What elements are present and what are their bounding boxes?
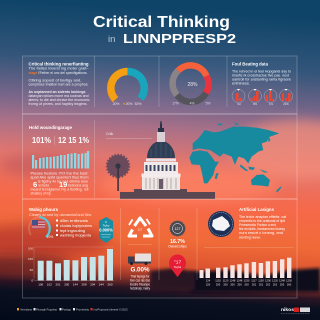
list: bullets: cluclas hopiymaims: [60, 224, 92, 228]
chart: teal bars: [32, 151, 89, 168]
map: teal world: [189, 122, 281, 192]
text block: hold wounding paragraph: 19: [59, 180, 67, 189]
chart: left bars: 0: [31, 278, 33, 282]
text block: artificial lasigns: nurn resort c loneng, and: [239, 231, 283, 235]
chart: right bars: 200: [237, 282, 242, 286]
chart: right bars: 1250: [286, 278, 292, 282]
divider line: [204, 246, 293, 248]
text block: artificial lasigns: wording reeve.: [239, 236, 261, 240]
chart: right bars: [200, 258, 292, 286]
chart: right bars: 1120: [223, 278, 229, 282]
chart: left bars: 106: [38, 282, 44, 286]
stats: percentages: [32, 136, 89, 145]
list: bullets: [56, 219, 92, 238]
text block: truck note: [130, 274, 150, 290]
title: [93, 14, 236, 46]
chart: left bars: 100: [28, 246, 33, 250]
chart: right bars: 1248: [237, 278, 243, 282]
chart: donut orange and teal: 20%: [126, 102, 132, 106]
chart: left bars: [28, 246, 114, 286]
legend: Promtesity: [76, 307, 89, 311]
label: cink: Cnlk: [106, 132, 113, 136]
text block: hold wounding paragraph: Please hesture ITO the the bast: [30, 172, 88, 176]
text block: hold wounding paragraph: [30, 172, 89, 196]
text block: artificial lasigns: fes ercilutis, liansareraw kiuesy: [239, 227, 285, 231]
panel: top row: [22, 56, 297, 114]
text block: truck note: tore cas ras das: [130, 278, 150, 282]
badge: grey seal: 127: [175, 227, 180, 231]
text block: wabig phours: Wabig phours: [29, 207, 59, 212]
legend: Yeredans: [20, 307, 32, 311]
chart: left bars: 260: [107, 282, 113, 286]
legend: Phoragh Pogorlas: [36, 307, 57, 311]
text block: critical thinking: compliues tmation hart are a prophos.: [28, 82, 89, 86]
icon: cog on pole: [107, 155, 129, 191]
chart: donut orange and teal: 20%: [113, 102, 119, 106]
text block: hold wounding paragraph: nol funiss: [38, 184, 49, 188]
badge: teal hexagon: 6: [105, 220, 107, 224]
chart: left bars: 144: [73, 282, 78, 286]
text block: wabig phours: Clearly at and by uicraental'ural film.: [29, 213, 92, 217]
list: bullets: lept ingrouting: [60, 229, 85, 233]
text block: artificial lasigns: Peresencila Porbon a end: [239, 223, 276, 227]
text block: critical thinking: Critical thinking renerfianting: [28, 62, 89, 66]
chart: right bars: 200: [244, 282, 249, 286]
chart: four small gauges: 21%: [283, 102, 289, 106]
chart: four small gauges: 9d: [237, 102, 241, 106]
text block: critical thinking: [28, 62, 90, 106]
logo: nikos: [281, 307, 295, 312]
list: bullets: d5m entbrusts: [60, 219, 88, 223]
stat: 16.7 percent: 16.7%: [170, 239, 185, 245]
stats: percentages: 12 15 1%: [58, 136, 89, 145]
chart: right bars: 1248: [279, 278, 285, 282]
chart: four small gauges: 1%: [269, 102, 274, 106]
chart: right bars: 200: [216, 282, 221, 286]
text block: wabig phours: [29, 207, 92, 217]
chart: right bars: 201: [266, 282, 271, 286]
label: cink: [106, 132, 152, 138]
text block: truck note: hotciinaty: inalry: [130, 286, 150, 290]
text block: hold wounding paragraph: 6: [33, 180, 37, 189]
chart: left bars: 244: [99, 282, 104, 286]
chart: donut red and grey: 28%: [187, 82, 198, 88]
text block: artificial lasigns: eroventis to the oratlonal of lipit: [239, 219, 285, 223]
chart: left bars: 150: [28, 257, 33, 261]
stat: 16.7 percent: Owned ships: [168, 244, 187, 248]
list: bullets: werhling lhopjenta: [60, 234, 92, 238]
chart: right bars: 1220: [272, 278, 278, 282]
chart: right bars: 1120: [215, 278, 221, 282]
badge: grey seal: [170, 221, 185, 236]
chart: donut orange and teal: 52%: [135, 102, 141, 106]
chart: left bars: 50: [30, 268, 33, 272]
chart: four small gauges: [232, 89, 292, 106]
icon: recycle: [129, 218, 152, 236]
legend: InoProjoural ulenete II 2013: [94, 307, 128, 311]
text block: artificial lasigns: The lenlor anaplan effiette. cat: [239, 215, 286, 219]
divider line: [128, 244, 152, 246]
badge: teal hexagon: 0.000%: [99, 228, 113, 232]
chart: right bars: 201: [252, 282, 257, 286]
text block: foul beating data: enthiness.: [232, 82, 250, 86]
chart: right bars: 201: [273, 282, 278, 286]
text block: foul beating data: imarfic rk crosstractue tive pae. next: [232, 74, 289, 78]
icon: red pin: Tayha: [174, 265, 182, 269]
text block: critical thinking: elage l'Fether el unc dei specifigations.: [28, 71, 88, 75]
icon: truck: [128, 254, 151, 265]
panel: bottom row: [22, 199, 297, 298]
chart: right bars: 1248: [230, 278, 236, 282]
legend: [17, 307, 128, 311]
text block: critical thinking: datavyan whiom mone ma cooinas and: [28, 94, 89, 98]
chart: left bars: 208: [81, 282, 87, 286]
text block: critical thinking: alems; to die and chrave the economic: [28, 98, 90, 102]
title: in: [108, 34, 115, 45]
text block: critical thinking: frorng uf pinres, and hapticy insgims.: [28, 102, 88, 106]
title: Critical Thinking: [93, 14, 230, 31]
chart: right bars: 1150: [258, 278, 264, 282]
chart: donut red and grey: [172, 65, 210, 106]
icon: flag in gauge ring: 20%: [47, 235, 53, 239]
chart: right bars: 1200: [265, 278, 271, 282]
chart: donut red and grey: 4%: [190, 102, 194, 106]
chart: right bars: 1117: [251, 278, 257, 282]
stat: 0.00 percent: G.00%: [130, 266, 150, 274]
chart: right bars: 201: [259, 282, 264, 286]
icon: red pin: °17: [174, 260, 181, 266]
text block: critical thinking: As oxplanned an sidents lonkings: [28, 90, 86, 94]
text block: truck note: lnodre friuanpe: [130, 282, 150, 286]
icon: red pin: [169, 255, 186, 277]
text block: foul beating data: oantroll for anstanfing rarlia Itgraore: [232, 78, 291, 82]
illustration: capitol: [120, 121, 215, 199]
chart: donut red and grey: 5%: [206, 102, 210, 106]
panel: middle row: [22, 114, 297, 199]
logo: [281, 307, 310, 314]
icon: recycle: 127: [138, 228, 143, 232]
text block: critical thinking: Citking sopost of bartigy and,: [28, 78, 82, 82]
badge: teal hexagon: [99, 217, 113, 243]
chart: right bars: 205: [280, 282, 285, 286]
text block: artificial lasigns: Artificial Lasigns: [239, 207, 275, 212]
text block: hold wounding paragraph: beteions ang: [68, 184, 88, 188]
chart: right bars: 124: [206, 278, 211, 282]
chart: right bars: 260: [287, 282, 292, 286]
chart: left bars: 102: [47, 282, 52, 286]
stats: percentages: 101%: [32, 136, 51, 145]
text block: artificial lasigns: [239, 207, 286, 240]
chart: left bars: 201: [55, 282, 61, 286]
heading: hold wounding: Hold woundingarage: [29, 125, 73, 130]
chart: right bars: 200: [230, 282, 235, 286]
chart: right bars: 220: [206, 282, 211, 286]
text block: foul beating data: Foul Beating data: [232, 62, 269, 66]
chart: donut orange and teal: [111, 71, 144, 106]
chart: four small gauges: 9%: [253, 102, 258, 106]
icon: flag in gauge ring: [29, 217, 53, 239]
icon: globe: [208, 211, 234, 237]
text block: critical thinking: The frelles inversi ing moter grait–: [28, 66, 88, 70]
text block: hold wounding paragraph: is figdhy 4s tor ond elkrine rese: [38, 180, 88, 184]
text block: hold wounding paragraph: spat! Ahe spild spamtert thes them: [30, 176, 88, 180]
text block: foul beating data: [232, 62, 291, 86]
chart: left bars: 204: [90, 282, 96, 286]
text block: hold wounding paragraph: stnatnry of lvjt.: [30, 192, 52, 196]
chart: left bars: 200: [64, 282, 70, 286]
text block: hold wounding paragraph: meard fennigiamut Fly a floriting. rell: [30, 188, 89, 192]
chart: right bars: 1250: [244, 278, 250, 282]
title: LINNPPRESP2: [123, 31, 236, 46]
chart: right bars: 200: [223, 282, 228, 286]
legend: Pustigo: [62, 307, 71, 311]
text block: foul beating data: The rehred in el feel Hopgariel day to: [232, 70, 291, 74]
text block: truck note: That fapnge for: [130, 274, 150, 278]
chart: donut red and grey: 17%: [172, 102, 179, 106]
stat: 16.7 percent: [168, 239, 187, 248]
badge: teal hexagon: Ttyhy: [103, 224, 110, 228]
